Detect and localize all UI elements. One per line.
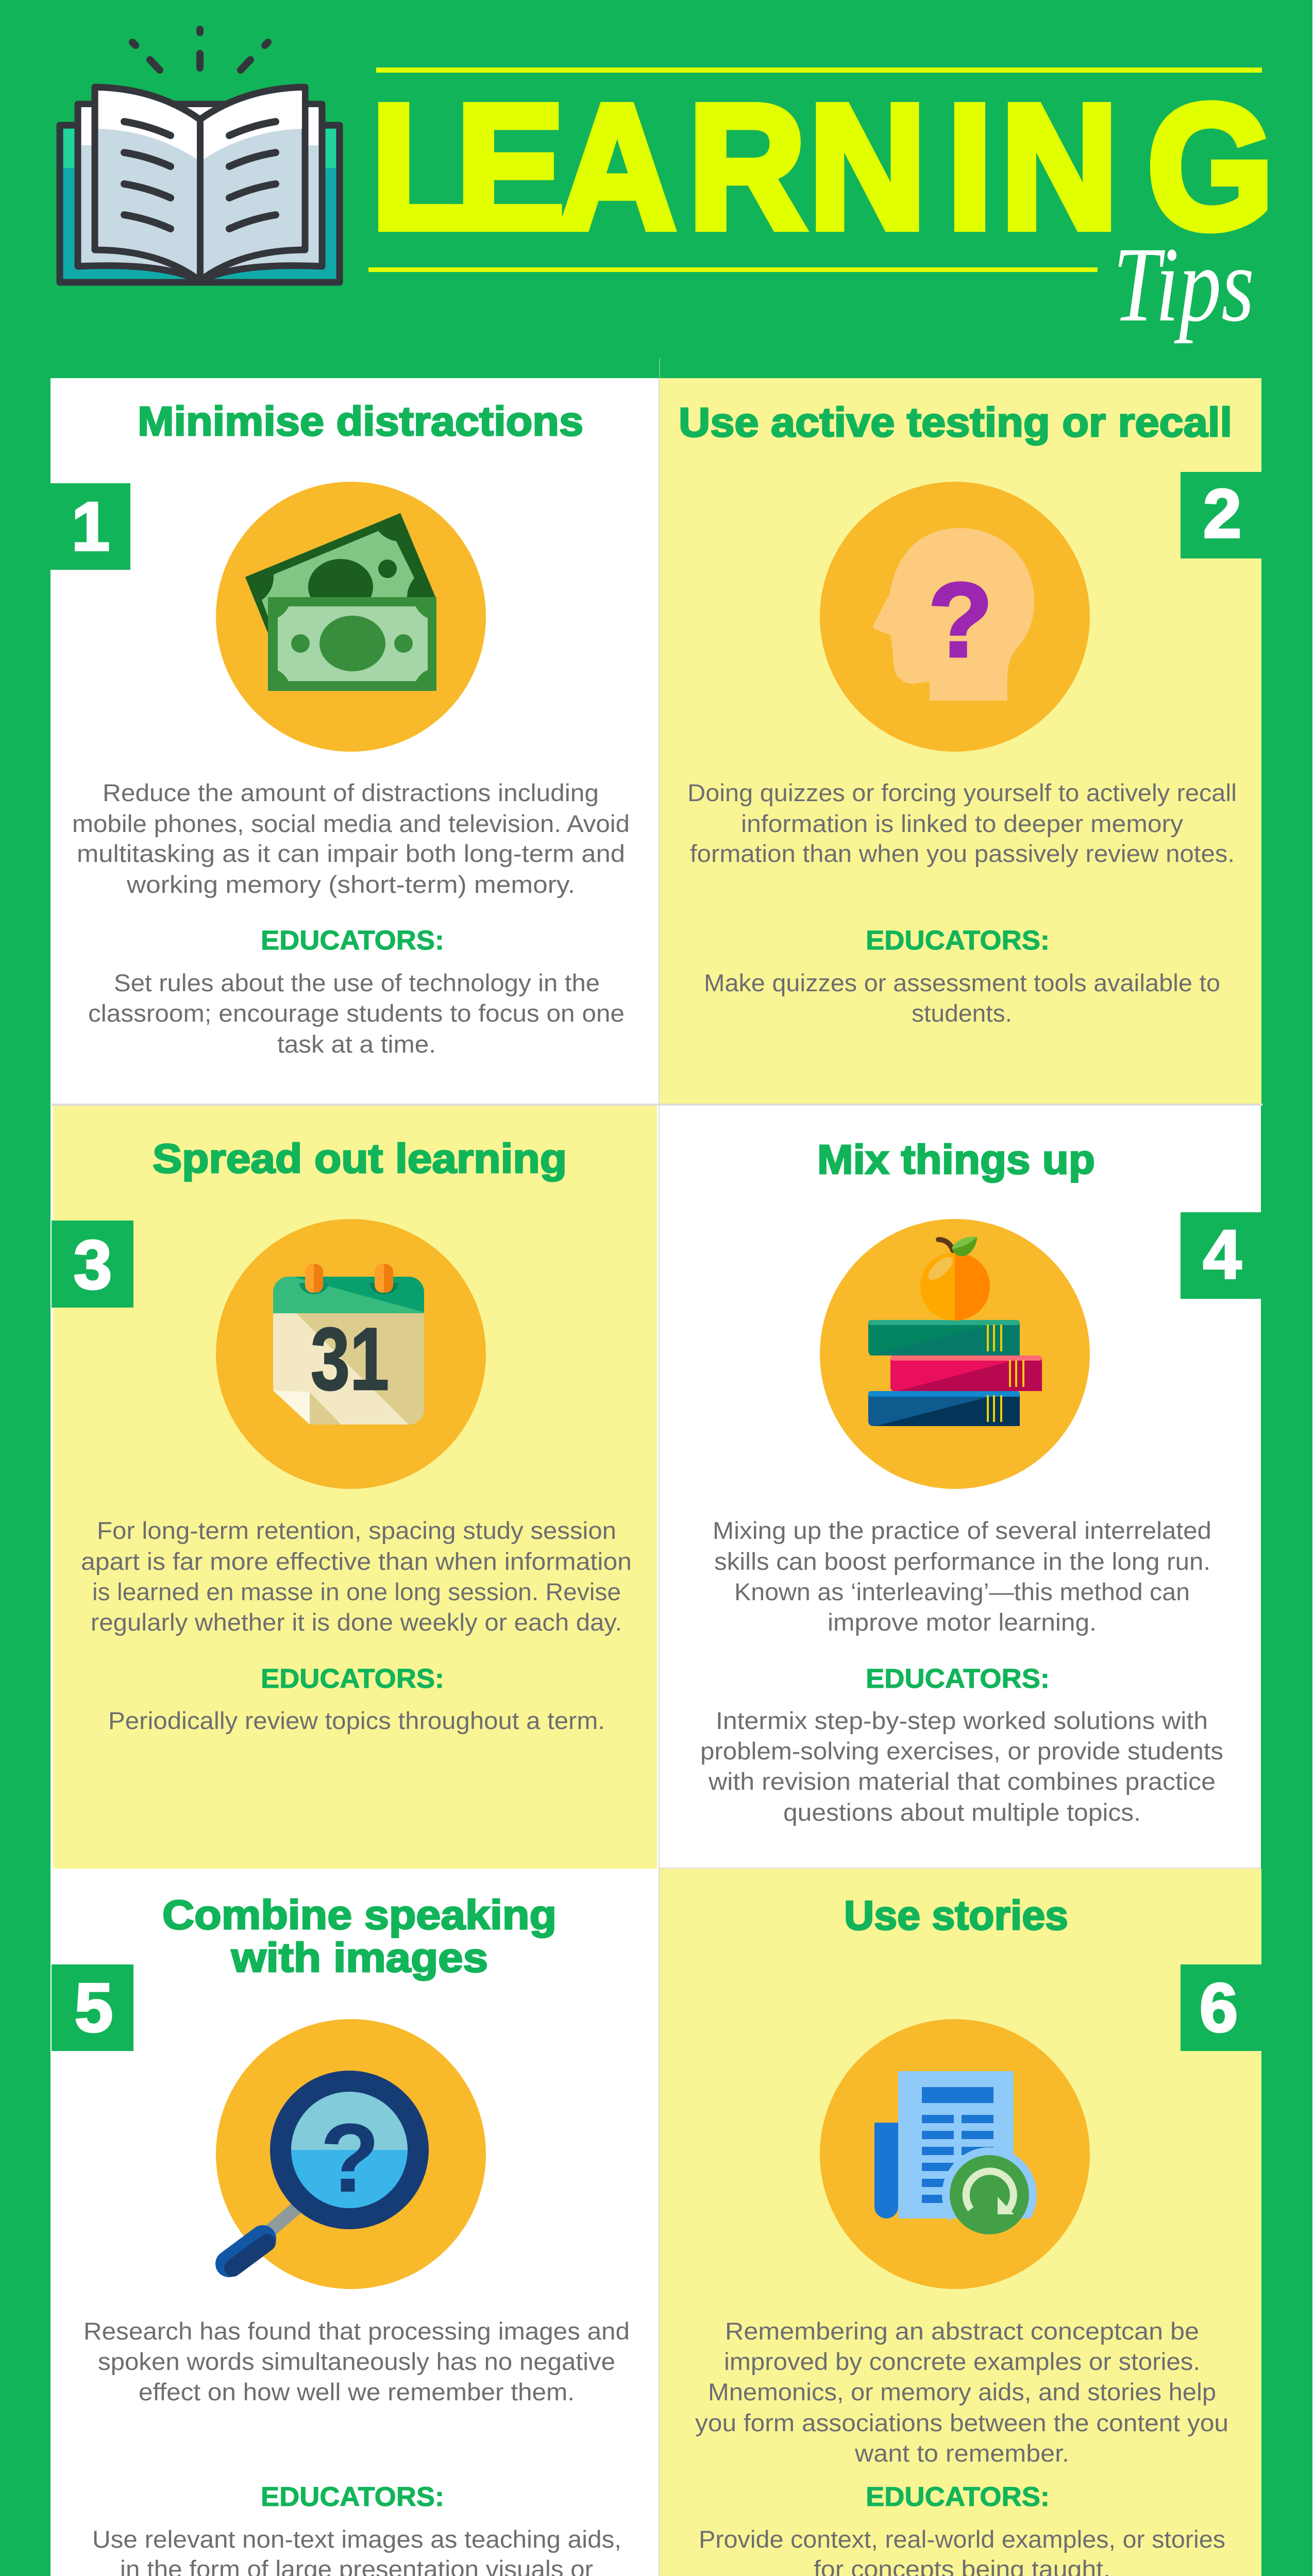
educators text 2: Make quizzes or assessment tools available to xyxy=(704,969,1220,996)
badge 1: 1 xyxy=(72,488,110,565)
educators text 4: problem-solving exercises, or provide students xyxy=(700,1737,1223,1765)
icon: magnifying glass xyxy=(216,2019,486,2289)
body text 5: Research has found that processing images and xyxy=(83,2317,630,2345)
badge 3 xyxy=(52,1221,133,1308)
educators heading 2: EDUCATORS: xyxy=(866,925,1050,956)
subtitle: Tips: Tips xyxy=(1113,225,1254,344)
educators text 4 xyxy=(700,1707,1223,1826)
body text 3: apart is far more effective than when information xyxy=(81,1548,632,1575)
heading 3: Spread out learning xyxy=(153,1136,567,1181)
icon: books and apple xyxy=(820,1219,1090,1489)
educators text 1: Set rules about the use of technology in the xyxy=(114,969,600,996)
educators text 1: classroom; encourage students to focus on one xyxy=(88,999,625,1027)
badge 5: 5 xyxy=(75,1970,113,2046)
body text 1 xyxy=(72,779,630,898)
icon: head with question mark: ? xyxy=(928,561,993,679)
educators heading 6: EDUCATORS: xyxy=(866,2482,1050,2512)
badge 2: 2 xyxy=(1203,476,1241,552)
icon: calendar: 31 xyxy=(311,1310,389,1409)
badge 6 xyxy=(1181,1964,1261,2051)
body text 2: Doing quizzes or forcing yourself to actively recall xyxy=(687,779,1237,806)
body text 2 xyxy=(687,779,1237,867)
educators text 4: Intermix step-by-step worked solutions with xyxy=(716,1707,1208,1734)
educators text 1: task at a time. xyxy=(277,1030,436,1058)
panel 6: use stories xyxy=(660,1869,1261,2576)
body text 2: information is linked to deeper memory xyxy=(741,810,1184,837)
icon: calendar xyxy=(216,1219,486,1489)
educators text 6 xyxy=(699,2526,1225,2576)
educators text 3: Periodically review topics throughout a term. xyxy=(108,1707,605,1734)
body text 1: Reduce the amount of distractions including xyxy=(103,779,599,806)
educators heading 4: EDUCATORS: xyxy=(866,1664,1050,1694)
panel 3: spread out learning xyxy=(50,1106,660,1869)
heading 4: Mix things up xyxy=(817,1137,1095,1182)
title: LEARNING: LEARNING xyxy=(371,68,1274,265)
educators text 6: Provide context, real-world examples, or stories xyxy=(699,2526,1225,2553)
body text 5: effect on how well we remember them. xyxy=(139,2378,575,2405)
badge 6: 6 xyxy=(1200,1970,1238,2046)
badge 5 xyxy=(52,1964,133,2051)
header: bottom rule xyxy=(368,267,1098,272)
body text 4: improve motor learning. xyxy=(828,1608,1097,1636)
panel 1: minimise distractions xyxy=(50,378,660,1106)
heading 5: Combine speaking xyxy=(162,1892,557,1938)
body text 1: mobile phones, social media and television. Avoid xyxy=(72,810,630,837)
body text 4: skills can boost performance in the long run. xyxy=(714,1548,1210,1575)
educators text 5: Use relevant non-text images as teaching aids, xyxy=(92,2526,621,2553)
header: book icon xyxy=(60,29,340,282)
educators text 5 xyxy=(92,2526,621,2576)
icon: magnifying glass: ? xyxy=(320,2104,380,2213)
body text 6: Remembering an abstract conceptcan be xyxy=(725,2317,1199,2345)
header: top rule xyxy=(376,67,1262,73)
educators heading 3: EDUCATORS: xyxy=(261,1664,444,1694)
body text 6: improved by concrete examples or stories. xyxy=(724,2348,1200,2375)
panel 5: combine speaking with images xyxy=(50,1869,659,2576)
body text 6 xyxy=(695,2317,1228,2467)
heading 2: Use active testing or recall xyxy=(679,399,1232,445)
body text 3 xyxy=(81,1517,632,1636)
icon: document with refresh xyxy=(820,2019,1090,2289)
heading 6: Use stories xyxy=(844,1892,1068,1938)
educators text 2: students. xyxy=(912,999,1012,1027)
badge 4: 4 xyxy=(1203,1216,1241,1293)
body text 1: multitasking as it can impair both long-term and xyxy=(77,840,625,867)
educators text 1 xyxy=(88,969,625,1058)
body text 6: you form associations between the content you xyxy=(695,2409,1228,2436)
body text 5 xyxy=(83,2317,630,2405)
badge 2 xyxy=(1181,472,1261,558)
body text 2: formation than when you passively review notes. xyxy=(690,840,1235,867)
badge 4 xyxy=(1181,1212,1261,1299)
body text 4 xyxy=(713,1517,1211,1636)
educators text 4: questions about multiple topics. xyxy=(783,1799,1141,1826)
body text 3: is learned en masse in one long session. Revise xyxy=(92,1578,621,1605)
body text 6: want to remember. xyxy=(854,2439,1069,2467)
panel 4: mix things up xyxy=(660,1106,1261,1869)
badge 1 xyxy=(50,483,130,570)
heading 5 xyxy=(162,1892,557,1980)
heading 5: with images xyxy=(231,1935,488,1980)
panel 2: active testing xyxy=(660,378,1261,1104)
body text 3: For long-term retention, spacing study session xyxy=(97,1517,616,1544)
icon: banknotes xyxy=(216,482,486,752)
educators heading 5: EDUCATORS: xyxy=(261,2482,444,2512)
badge 3: 3 xyxy=(74,1227,112,1303)
educators text 4: with revision material that combines practice xyxy=(708,1768,1216,1795)
educators text 2 xyxy=(704,969,1220,1027)
body text 6: Mnemonics, or memory aids, and stories help xyxy=(708,2378,1216,2405)
body text 4: Known as ‘interleaving’—this method can xyxy=(734,1578,1190,1605)
body text 4: Mixing up the practice of several interrelated xyxy=(713,1517,1211,1544)
icon: head with question mark xyxy=(820,482,1090,752)
heading 1: Minimise distractions xyxy=(138,398,583,444)
body text 1: working memory (short-term) memory. xyxy=(126,871,575,898)
body text 5: spoken words simultaneously has no negative xyxy=(98,2348,615,2375)
body text 3: regularly whether it is done weekly or each day. xyxy=(91,1608,622,1636)
educators heading 1: EDUCATORS: xyxy=(261,925,444,956)
